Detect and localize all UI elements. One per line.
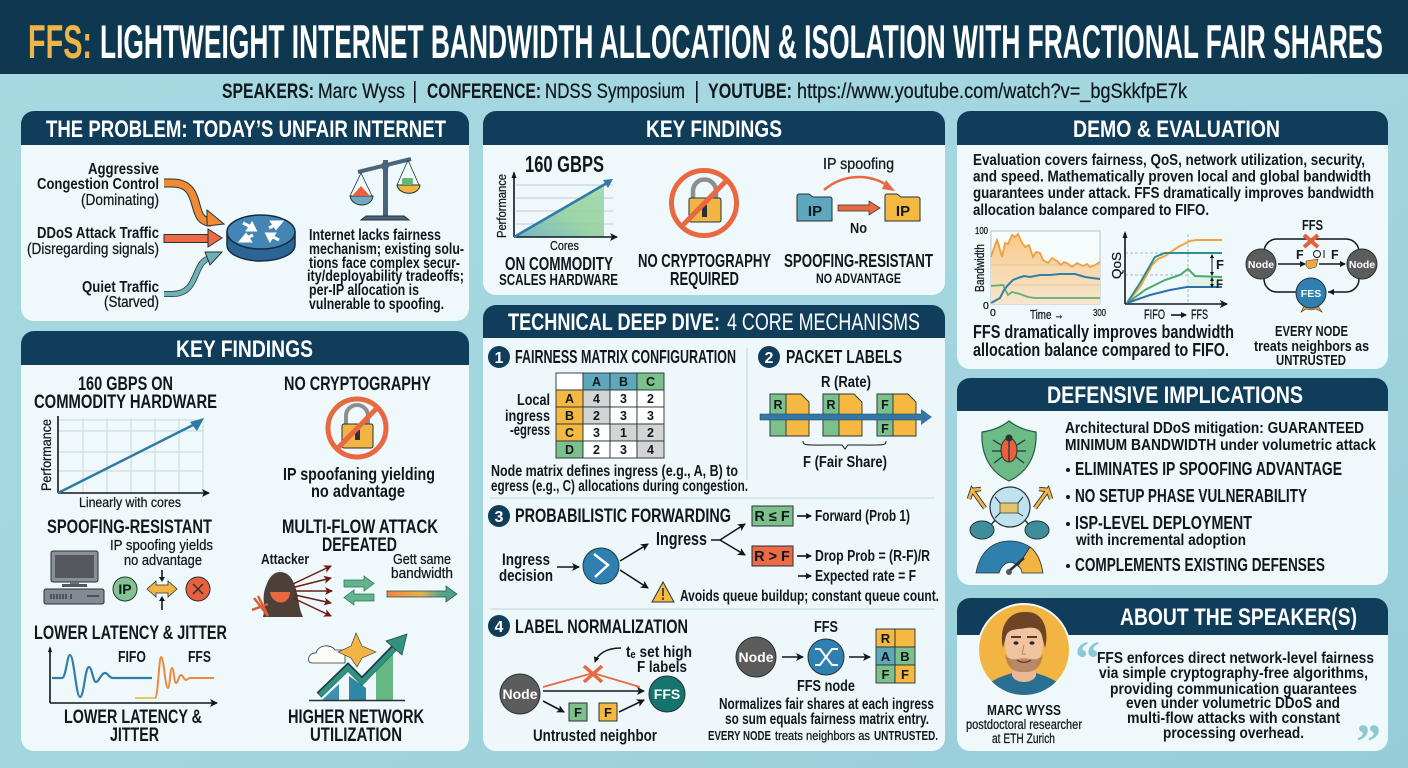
table: fairness matrix: 3 <box>620 409 627 423</box>
heading: technical deep dive <box>508 309 920 336</box>
mechanism 4: label normalization: treats neighbors as <box>775 728 870 743</box>
diagram: untrusted neighbour path: F <box>574 705 582 720</box>
icon: folder IP source <box>797 194 832 221</box>
chart: QoS FIFO to FFS <box>1109 231 1227 322</box>
arrows: ingress fork <box>711 524 745 555</box>
finding: multi-flow attack defeated: bandwidth <box>391 566 453 582</box>
mechanism 3: probabilistic forwarding: Drop Prob = (R-F)/R <box>815 548 930 565</box>
text: problem description: tions face complex secur- <box>309 255 460 272</box>
number badge 3: 3 <box>495 509 504 526</box>
finding: 160 Gbps <box>34 374 217 510</box>
chart: latency waves: FIFO <box>118 649 146 666</box>
mechanism 2: packet labels: PACKET LABELS <box>786 347 902 367</box>
speaker and source line: https://www.youtube.com/watch?v=_bgSkkfpE7k <box>797 80 1187 103</box>
finding: no cryptography required: REQUIRED <box>670 269 739 289</box>
mechanism 1: fairness matrix: -egress <box>510 422 550 439</box>
quote text: processing overhead. <box>1163 725 1304 742</box>
chart: QoS FIFO to FFS: FIFO <box>1144 306 1165 322</box>
arrow: quiet traffic <box>164 252 222 294</box>
heading: key findings: KEY FINDINGS <box>176 336 313 363</box>
diagram: labelled packets on a stream: R <box>826 398 836 412</box>
chart: performance vs cores: Linearly with cores <box>79 494 181 510</box>
panel: key findings middle <box>483 111 945 295</box>
heading: technical deep dive: 4 CORE MECHANISMS <box>727 309 920 336</box>
finding: 160 Gbps scaling: 160 GBPS <box>525 151 604 177</box>
icon: crossed-out lock <box>672 170 736 236</box>
traffic labels: (Starved) <box>104 294 159 311</box>
mechanism 1: fairness matrix: Node matrix defines ingress (e.g., A, B) to <box>491 463 738 480</box>
arrow: forward <box>797 515 811 517</box>
icon: computer <box>44 551 104 604</box>
chart: bandwidth over time: 100 <box>975 225 988 237</box>
chart: performance vs cores <box>38 416 209 510</box>
text: every node note <box>1254 324 1369 369</box>
panel: defensive implications <box>957 378 1388 585</box>
mechanism 1: fairness matrix: FAIRNESS MATRIX CONFIGURATION <box>515 347 736 367</box>
chart: bandwidth over time: Time → <box>1030 307 1064 322</box>
finding: spoofing resistant: SPOOFING-RESISTANT <box>784 251 933 271</box>
table: fairness matrix: D <box>565 443 574 457</box>
arrows: attack flows <box>293 566 332 616</box>
icon: double arrow <box>147 570 177 610</box>
chart: bandwidth over time: 0 <box>990 307 996 319</box>
diagram: untrusted neighbour path <box>500 666 685 721</box>
table: fairness matrix: C <box>646 375 655 389</box>
finding: spoofing-resistant: SPOOFING-RESISTANT <box>47 517 212 538</box>
diagram: labelled packets on a stream: F <box>881 398 889 412</box>
list: defensive bullets: with incremental adoption <box>1075 532 1246 549</box>
finding: lower latency and jitter: LOWER LATENCY & <box>64 707 202 728</box>
number badge 4 <box>488 615 510 637</box>
table: fairness matrix: 2 <box>593 443 600 457</box>
title banner: FFS: <box>28 15 92 68</box>
mechanism 4: label normalization: UNTRUSTED. <box>874 728 938 743</box>
number badge 2: 2 <box>765 350 774 367</box>
heading: about the speaker: ABOUT THE SPEAKER(S) <box>1120 604 1357 631</box>
traffic labels: Aggressive <box>88 161 159 178</box>
text: improvement callout: FFS dramatically improves bandwidth <box>973 322 1234 342</box>
speaker name and role: postdoctoral researcher <box>966 717 1082 732</box>
speaker name and role <box>966 702 1082 746</box>
chart: QoS FIFO to FFS: F <box>1216 257 1224 272</box>
mechanism 1: fairness matrix: egress (e.g., C) allocations during congestion. <box>491 478 748 495</box>
arrow: expected rate <box>798 575 811 577</box>
arrow: aggressive traffic <box>164 183 224 226</box>
finding: higher network utilization: UTILIZATION <box>310 725 402 746</box>
diagram: FFS normalization: R <box>881 631 891 646</box>
diagram: FFS normalization: B <box>900 649 910 664</box>
speaker name and role: MARC WYSS <box>987 702 1061 719</box>
icon: IP badge <box>113 577 137 601</box>
diagram: node trust loop: FFS <box>1302 218 1323 234</box>
traffic labels: DDoS Attack Traffic <box>37 225 159 242</box>
chart: latency waves <box>48 646 217 703</box>
mechanism 3: probabilistic forwarding: Expected rate = F <box>815 568 916 585</box>
heading: technical deep dive: TECHNICAL DEEP DIVE: <box>508 309 720 336</box>
finding: no cryptography: NO CRYPTOGRAPHY <box>284 374 431 395</box>
chart: scaling area <box>494 171 617 253</box>
finding: lower latency and jitter: JITTER <box>110 725 159 746</box>
text: evaluation summary: allocation balance compared to FIFO. <box>973 202 1209 219</box>
arrows: green exchange <box>344 576 374 605</box>
title banner <box>0 0 1408 74</box>
number badge 4: 4 <box>495 619 504 636</box>
speaker and source line: NDSS Symposium <box>545 80 685 103</box>
icon: hooded attacker <box>252 572 303 617</box>
diagram: FFS normalization: A <box>881 649 891 664</box>
finding: spoofing resistant: NO ADVANTAGE <box>816 270 901 286</box>
icon: utilization growth <box>309 633 407 700</box>
icon: network magnifier <box>969 487 1051 539</box>
icon: folder IP destination <box>885 194 920 221</box>
arrows: decision branches <box>620 544 648 588</box>
chart: scaling area: Performance <box>494 174 509 238</box>
quote mark close: ” <box>1356 713 1381 768</box>
chart: bandwidth over time: 0 <box>983 300 989 312</box>
diagram: untrusted neighbour path: F <box>604 705 612 720</box>
panel: key findings left <box>21 331 469 751</box>
heading: key findings: KEY FINDINGS <box>646 116 782 143</box>
table: fairness matrix: 1 <box>620 426 627 440</box>
portrait: Marc Wyss <box>977 603 1071 700</box>
mechanism 4: label normalization: FFS node <box>797 678 855 695</box>
icon: gauge <box>976 541 1043 575</box>
text: problem description <box>307 227 464 313</box>
table: fairness matrix: 2 <box>647 426 654 440</box>
mechanism 4: label normalization: Normalizes fair shares at each ingress <box>719 696 934 713</box>
list: defensive bullets: NO SETUP PHASE VULNERABILITY <box>1075 485 1307 506</box>
box: R above F: R > F <box>754 549 790 565</box>
icon: warning <box>652 582 674 602</box>
icon: router <box>227 215 295 261</box>
text: every node note: treats neighbors as <box>1254 339 1369 355</box>
chart: scaling area: Cores <box>550 238 579 253</box>
box: R at most F <box>752 506 793 526</box>
diagram: node trust loop: Node <box>1248 259 1274 271</box>
icon: IP badge: IP <box>118 581 132 597</box>
table: fairness matrix: A <box>592 375 601 389</box>
icon: shield with bug <box>982 421 1036 481</box>
table: fairness matrix: 3 <box>620 392 627 406</box>
finding: no cryptography required: NO CRYPTOGRAPHY <box>638 251 771 271</box>
arrow: spoofing curve <box>824 177 895 191</box>
table: fairness matrix: 2 <box>593 409 600 423</box>
diagram: labelled packets on a stream <box>760 394 932 449</box>
finding: spoofing-resistant: IP spoofing yields <box>110 537 213 554</box>
arrow: DDoS traffic <box>164 229 222 247</box>
quote text: via simple cryptography-free algorithms, <box>1099 665 1368 682</box>
finding: lower latency and jitter <box>34 623 227 746</box>
traffic labels: Quiet Traffic <box>82 279 159 296</box>
text: problem description: per-IP allocation is <box>309 282 419 299</box>
chart: QoS FIFO to FFS: FFS <box>1191 306 1208 322</box>
finding: 160 Gbps: COMMODITY HARDWARE <box>34 392 217 413</box>
mechanism 4: label normalization: LABEL NORMALIZATION <box>515 617 688 638</box>
mechanism 2: packet labels: F (Fair Share) <box>803 454 887 471</box>
table: fairness matrix: 4 <box>647 443 654 457</box>
chart: latency waves: FFS <box>188 649 211 666</box>
chart: QoS FIFO to FFS: F <box>1216 279 1223 291</box>
finding: 160 Gbps scaling: ON COMMODITY <box>505 254 613 274</box>
finding: multi-flow attack defeated: DEFEATED <box>322 535 397 556</box>
mechanism 4: label normalization: F labels <box>637 659 687 676</box>
mechanism 2: packet labels: R (Rate) <box>821 374 871 391</box>
box: R at most F: R ≤ F <box>754 509 790 525</box>
chart: QoS FIFO to FFS: QoS <box>1109 252 1124 279</box>
mechanism 4: label normalization: tₑ set high <box>626 644 692 661</box>
table: fairness matrix: B <box>619 375 628 389</box>
diagram: node trust loop: FES <box>1301 288 1321 300</box>
box: R above F <box>752 546 793 566</box>
diagram: node trust loop: Node <box>1349 259 1375 271</box>
finding: spoofing-resistant <box>44 517 213 610</box>
text: problem description: Internet lacks fairness <box>309 227 441 244</box>
finding: multi-flow attack defeated: Gett same <box>393 552 451 568</box>
mechanism 4: label normalization <box>488 615 938 745</box>
finding: no cryptography: IP spoofaning yielding <box>283 464 435 484</box>
text: defensive summary: Architectural DDoS mitigation: GUARANTEED <box>1065 420 1364 437</box>
text: every node note: UNTRUSTED <box>1276 353 1346 369</box>
icon: folder IP source: IP <box>808 203 822 220</box>
finding: spoofing-resistant: no advantage <box>124 552 202 569</box>
speaker and source line: CONFERENCE: <box>427 80 541 103</box>
diagram: untrusted neighbour path: FFS <box>654 686 680 702</box>
table: fairness matrix: 3 <box>647 409 654 423</box>
icon: crossed-out lock <box>328 399 386 457</box>
heading: defensive implications: DEFENSIVE IMPLICATIONS <box>1047 382 1303 409</box>
list: defensive bullets: COMPLEMENTS EXISTING DEFENSES <box>1075 554 1325 575</box>
diagram: FFS normalization <box>736 629 915 683</box>
chart: performance vs cores: Performance <box>38 419 54 491</box>
panel: about the speaker <box>957 598 1388 768</box>
table: fairness matrix: C <box>565 426 574 440</box>
icon: rejected badge <box>186 577 210 601</box>
mechanism 3: probabilistic forwarding: decision <box>499 567 553 585</box>
list: defensive bullets: ISP-LEVEL DEPLOYMENT <box>1075 512 1253 533</box>
finding: multi-flow attack defeated <box>252 517 457 617</box>
text: defensive summary <box>1065 420 1376 454</box>
arrow: blocked path <box>838 201 880 215</box>
speaker and source line: Marc Wyss <box>318 80 405 103</box>
mechanism 4: label normalization: so sum equals fairness matrix entry. <box>725 711 929 728</box>
heading: the problem: THE PROBLEM: TODAY’S UNFAIR INTERNET <box>46 116 446 143</box>
mechanism 1: fairness matrix <box>488 346 748 495</box>
icon: decision node <box>583 548 619 584</box>
speaker and source line: SPEAKERS: <box>222 80 314 103</box>
arrow: drop <box>797 555 811 557</box>
speaker name and role: at ETH Zurich <box>992 731 1055 746</box>
icon: unbalanced scales <box>350 159 420 220</box>
mechanism 4: label normalization: FFS <box>814 619 838 636</box>
finding: 160 Gbps scaling: SCALES HARDWARE <box>499 272 618 289</box>
chart: bandwidth over time: Bandwidth <box>972 244 987 292</box>
table: fairness matrix: 3 <box>593 426 600 440</box>
traffic labels: (Dominating) <box>81 192 159 209</box>
finding: multi-flow attack defeated: Attacker <box>261 552 309 568</box>
icon: folder IP destination: IP <box>896 203 910 220</box>
diagram: FFS normalization: Node <box>738 649 774 665</box>
text: improvement callout: allocation balance compared to FIFO. <box>973 340 1229 360</box>
text: every node note: EVERY NODE <box>1275 324 1348 340</box>
diagram: node trust loop <box>1246 218 1377 312</box>
quote text: providing communication guarantees <box>1110 681 1357 698</box>
traffic labels <box>27 161 159 311</box>
panel: demo and evaluation <box>957 111 1388 369</box>
finding: 160 Gbps scaling <box>494 151 618 289</box>
finding: no cryptography: no advantage <box>311 481 405 501</box>
number badge 3 <box>488 505 510 527</box>
finding: spoofing resistant: No <box>850 220 867 237</box>
number badge 1: 1 <box>495 350 504 367</box>
finding: multi-flow attack defeated: MULTI-FLOW ATTACK <box>282 517 438 538</box>
panel: technical deep dive <box>483 305 945 751</box>
diagram: labelled packets on a stream: F <box>881 422 889 436</box>
chart: bandwidth over time: 300 <box>1093 307 1106 319</box>
mechanism 1: fairness matrix: Local <box>517 392 550 409</box>
mechanism 4: label normalization: Untrusted neighbor <box>533 726 657 745</box>
diagram: node trust loop: F <box>1296 248 1304 262</box>
mechanism 3: probabilistic forwarding: PROBABILISTIC FORWARDING <box>515 506 731 527</box>
speaker and source line <box>222 80 1187 103</box>
finding: spoofing resistant <box>784 156 933 286</box>
mechanism 3: probabilistic forwarding: Ingress <box>502 551 550 569</box>
table: fairness matrix: B <box>565 409 574 423</box>
list: defensive bullets <box>1066 458 1342 575</box>
mechanism 3: probabilistic forwarding: Ingress <box>656 529 707 549</box>
arrow: same bandwidth <box>387 586 457 602</box>
chart: bandwidth over time <box>972 225 1106 322</box>
quote mark open: “ <box>1075 630 1100 686</box>
speaker and source line: YOUTUBE: <box>708 80 792 103</box>
diagram: labelled packets on a stream: R <box>773 398 783 412</box>
finding: 160 Gbps: 160 GBPS ON <box>78 374 173 395</box>
mechanism 3: probabilistic forwarding <box>488 505 939 605</box>
table: fairness matrix: 3 <box>620 443 627 457</box>
diagram: FFS normalization: F <box>901 667 909 682</box>
table: fairness matrix <box>556 373 664 458</box>
arrow: label note <box>595 648 621 662</box>
heading: demo and evaluation: DEMO & EVALUATION <box>1073 116 1280 143</box>
mechanism 1: fairness matrix: ingress <box>505 408 550 425</box>
text: problem description: ity/deployability tradeoffs; <box>307 268 464 285</box>
table: fairness matrix: 2 <box>647 392 654 406</box>
number badge 1 <box>488 346 510 368</box>
number badge 2 <box>758 346 780 368</box>
finding: no cryptography <box>283 374 435 501</box>
mechanism 4: label normalization: EVERY NODE <box>708 728 771 743</box>
quote text: even under volumetric DDoS and <box>1126 695 1340 712</box>
text: evaluation summary <box>973 152 1374 219</box>
table: fairness matrix: 4 <box>593 392 600 406</box>
finding: higher network utilization: HIGHER NETWORK <box>288 707 424 728</box>
quote text: multi-flow attacks with constant <box>1127 710 1341 727</box>
panel: the problem <box>21 111 469 321</box>
diagram: node trust loop: F <box>1331 248 1339 262</box>
finding: no cryptography required <box>638 170 771 289</box>
text: problem description: mechanism; existing solu- <box>309 241 464 258</box>
text: improvement callout <box>973 322 1234 360</box>
diagram: untrusted neighbour path: Node <box>502 686 538 702</box>
traffic labels: (Disregarding signals) <box>27 241 159 258</box>
finding: higher network utilization <box>288 633 424 746</box>
traffic labels: Congestion Control <box>37 176 159 193</box>
finding: lower latency and jitter: LOWER LATENCY & JITTER <box>34 623 227 644</box>
mechanism 3: probabilistic forwarding: Avoids queue buildup; constant queue count. <box>680 588 939 605</box>
arrow: into decision <box>557 566 579 568</box>
finding: spoofing resistant: IP spoofing <box>823 156 894 173</box>
table: fairness matrix: A <box>565 392 574 406</box>
diagram: FFS normalization: F <box>882 667 890 682</box>
quote text <box>1097 650 1374 742</box>
mechanism 2: packet labels <box>758 346 932 471</box>
mechanism 3: probabilistic forwarding: Forward (Prob 1) <box>815 508 910 525</box>
text: problem description: vulnerable to spoofing. <box>309 296 444 313</box>
